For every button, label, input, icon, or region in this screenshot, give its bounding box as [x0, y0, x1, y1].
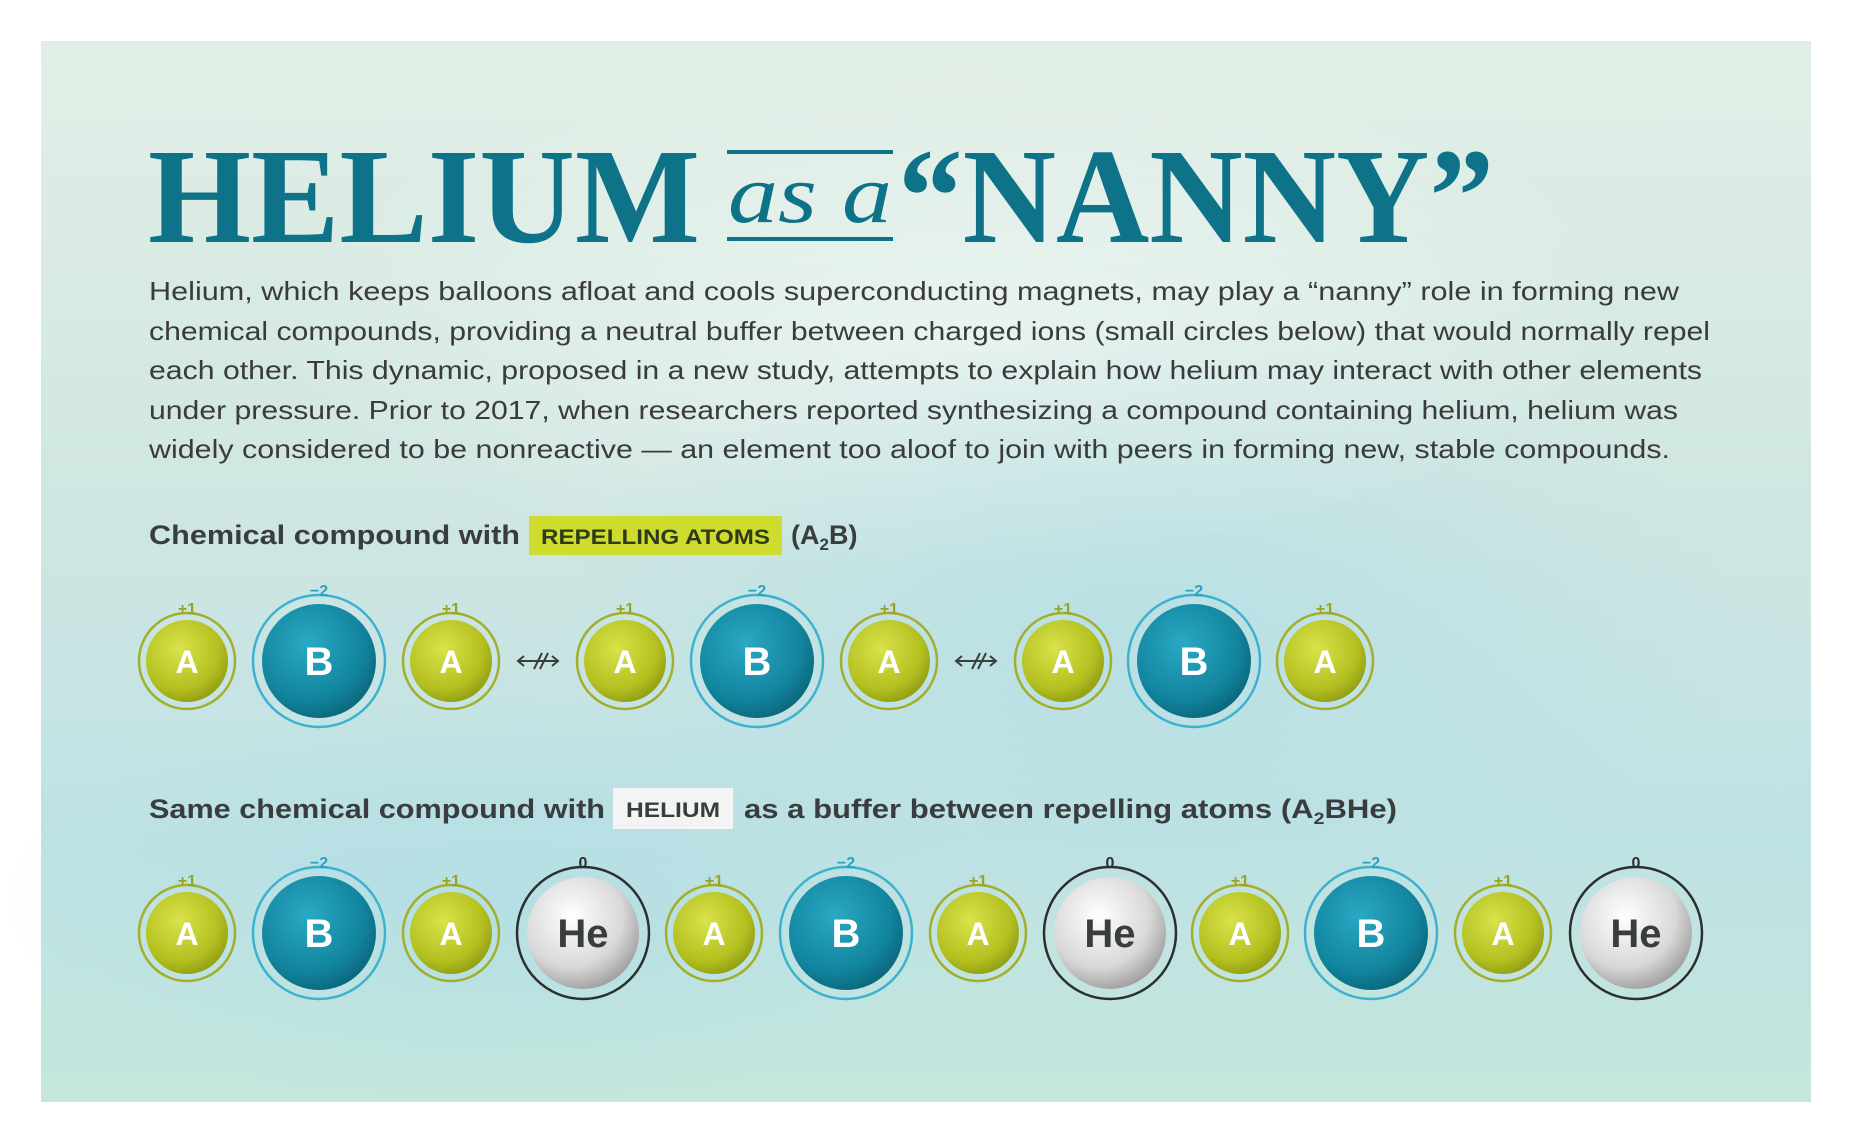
row 2: A2BHe: A — [1491, 916, 1515, 952]
row 1: A2B repelling: A — [1313, 644, 1337, 680]
row 1: A2B repelling: B — [743, 640, 771, 684]
row 2: A2BHe: A — [439, 916, 463, 952]
intro paragraph: chemical compounds, providing a neutral buffer between charged ions (small circles below) that would normally repel — [149, 316, 1710, 346]
row 2: A2BHe: −2 — [837, 855, 855, 872]
heading: helium buffer: BHe) — [1325, 794, 1397, 824]
heading: helium buffer: HELIUM — [626, 799, 720, 822]
heading: helium buffer — [149, 788, 1397, 829]
row 1: A2B repelling: −2 — [1185, 583, 1203, 600]
row 1: A2B repelling: +1 — [880, 601, 898, 618]
title: HELIUM — [148, 122, 700, 272]
row 2: A2BHe: +1 — [1231, 873, 1249, 890]
row 2: A2BHe: −2 — [310, 855, 328, 872]
title — [148, 122, 1494, 272]
row 1: A2B repelling: +1 — [442, 601, 460, 618]
intro paragraph — [148, 276, 1710, 464]
heading: helium buffer: as a buffer between repelling atoms (A — [744, 794, 1239, 824]
heading: repelling atoms — [149, 516, 857, 555]
arrow: no bond — [518, 653, 558, 669]
row 2: A2BHe: −2 — [1362, 855, 1380, 872]
row 2: A2BHe: 0 — [579, 855, 588, 872]
row 2: A2BHe: +1 — [442, 873, 460, 890]
row 2: A2BHe: A — [702, 916, 726, 952]
row 2: A2BHe: B — [1357, 912, 1385, 956]
row 2: A2BHe: +1 — [705, 873, 723, 890]
row 1: A2B repelling: A — [1051, 644, 1075, 680]
heading: repelling atoms: (A — [791, 520, 820, 550]
heading: helium buffer: 2 — [1314, 809, 1325, 828]
row 2: A2BHe: +1 — [178, 873, 196, 890]
row 1: A2B repelling: A — [877, 644, 901, 680]
row 1: A2B repelling: +1 — [1316, 601, 1334, 618]
heading: repelling atoms: B) — [829, 520, 857, 550]
row 2: A2BHe — [139, 855, 1702, 999]
row 1: A2B repelling: A — [613, 644, 637, 680]
intro paragraph: each other. This dynamic, proposed in a new study, attempts to explain how helium may interact with other elements — [149, 355, 1702, 385]
title: “NANNY” — [898, 122, 1494, 272]
row 2: A2BHe: He — [557, 912, 609, 956]
row 1: A2B repelling: A — [439, 644, 463, 680]
row 2: A2BHe: A — [175, 916, 199, 952]
row 1: A2B repelling: B — [305, 640, 333, 684]
row 1: A2B repelling: −2 — [748, 583, 766, 600]
row 1: A2B repelling: +1 — [616, 601, 634, 618]
row 1: A2B repelling: +1 — [1054, 601, 1072, 618]
intro paragraph: under pressure. Prior to 2017, when researchers reported synthesizing a compound containing helium, helium was — [149, 395, 1678, 425]
row 2: A2BHe: He — [1610, 912, 1662, 956]
intro paragraph: Helium, which keeps balloons afloat and cools superconducting magnets, may play a “nanny” role in forming new — [149, 276, 1679, 306]
row 2: A2BHe: +1 — [1494, 873, 1512, 890]
row 1: A2B repelling: A — [175, 644, 199, 680]
heading: helium buffer: Same chemical compound with — [149, 794, 605, 824]
row 1: A2B repelling: +1 — [178, 601, 196, 618]
arrow: no bond — [956, 653, 996, 669]
row 2: A2BHe: B — [305, 912, 333, 956]
row 2: A2BHe: 0 — [1632, 855, 1641, 872]
title: as a — [728, 148, 892, 241]
row 2: A2BHe: A — [1228, 916, 1252, 952]
row 2: A2BHe: B — [832, 912, 860, 956]
row 1: A2B repelling: −2 — [310, 583, 328, 600]
row 2: A2BHe: 0 — [1106, 855, 1115, 872]
heading: repelling atoms: 2 — [820, 535, 829, 554]
row 1: A2B repelling: B — [1180, 640, 1208, 684]
row 2: A2BHe: He — [1084, 912, 1136, 956]
intro paragraph: widely considered to be nonreactive — an element too aloof to join with peers in forming new, stable compounds. — [148, 434, 1670, 464]
row 2: A2BHe: A — [966, 916, 990, 952]
row 2: A2BHe: +1 — [969, 873, 987, 890]
heading: repelling atoms: REPELLING ATOMS — [541, 526, 770, 549]
heading: repelling atoms: Chemical compound with — [149, 520, 520, 550]
row 1: A2B repelling — [139, 583, 1373, 727]
